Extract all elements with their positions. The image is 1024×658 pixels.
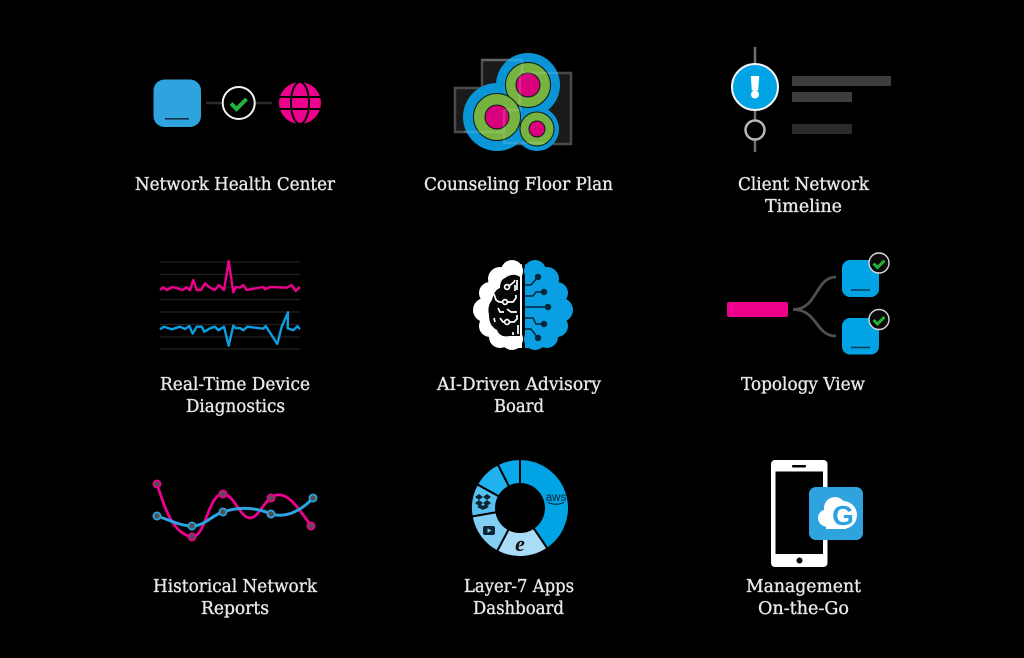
- chart: donut: [471, 459, 569, 557]
- icon: floor plan with coverage bubbles: [455, 53, 571, 151]
- heading: On-the-Go: [758, 599, 849, 619]
- panel: Counseling Floor Plan: [424, 53, 613, 195]
- heading: Layer-7 Apps: [464, 577, 574, 597]
- icon: phone with app: G: [832, 500, 854, 531]
- heading: Reports: [201, 599, 269, 619]
- panel: Topology View: [727, 253, 889, 395]
- icon: brain: [473, 260, 573, 350]
- heading: Counseling Floor Plan: [424, 175, 613, 195]
- panel: Real-Time Device Diagnostics: [160, 261, 310, 417]
- heading: Historical Network: [153, 577, 317, 597]
- heading: Diagnostics: [186, 397, 285, 417]
- heading: Real-Time Device: [160, 375, 310, 395]
- chart: device diagnostics lines: [160, 261, 300, 349]
- heading: [436, 375, 601, 417]
- label: aws: aws: [546, 492, 566, 504]
- icon: timeline: [732, 47, 891, 152]
- heading: [160, 375, 310, 417]
- heading: [153, 577, 317, 619]
- chart: historical lines: [153, 480, 317, 541]
- right blue half: [524, 260, 573, 350]
- heading: [738, 175, 869, 217]
- icon: phone with app: [771, 460, 863, 567]
- heading: [746, 577, 861, 619]
- heading: AI-Driven Advisory: [436, 375, 601, 395]
- heading: Board: [494, 397, 544, 417]
- heading: Dashboard: [473, 599, 564, 619]
- heading: [464, 577, 574, 619]
- panel: Network Health Center: [135, 80, 336, 195]
- heading: Network Health Center: [135, 175, 336, 195]
- icon: topology: [727, 253, 889, 354]
- heading: Topology View: [741, 375, 865, 395]
- panel: Historical Network Reports: [153, 480, 317, 619]
- heading: Client Network: [738, 175, 869, 195]
- panel: AI-Driven Advisory Board: [436, 260, 601, 417]
- panel: Layer-7 Apps Dashboard: [464, 459, 574, 619]
- icon: video: [483, 526, 495, 535]
- panel: Client Network Timeline: [732, 47, 891, 217]
- icon: browser: e: [515, 531, 525, 556]
- left white half: [473, 260, 523, 350]
- heading: Management: [746, 577, 861, 597]
- panel: Management On-the-Go: [746, 460, 863, 619]
- heading: Timeline: [765, 197, 842, 217]
- icon: network health: [154, 80, 321, 127]
- icon: dropbox: [475, 494, 491, 510]
